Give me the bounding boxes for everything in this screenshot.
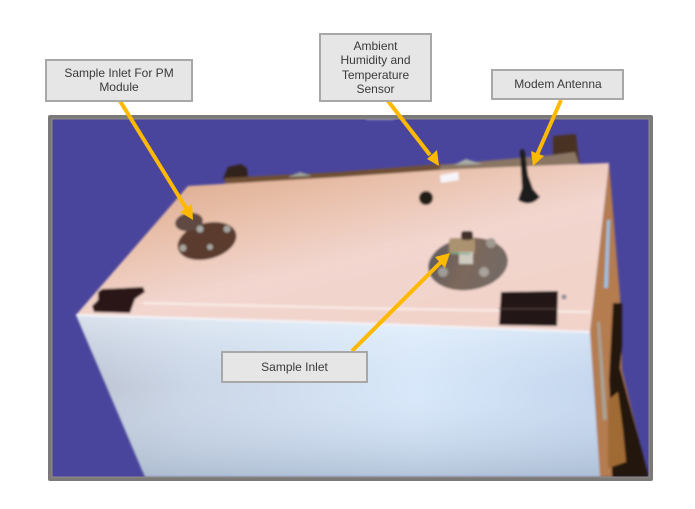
faint artefact at top of photo [366,118,394,120]
PM inlet disc [176,220,238,262]
callout: ambient humidity and temperature sensor: Ambient [353,39,398,53]
arrow: modem antenna [531,100,561,166]
arrow: sample inlet [352,253,450,351]
front panel [76,315,600,477]
callout: ambient humidity and temperature sensor [320,34,431,101]
latch right [499,291,558,326]
photo: enclosure on blue background [48,115,653,481]
callout: ambient humidity and temperature sensor: Temperature [342,68,410,82]
rear bracket right [553,134,580,165]
dark rear strip [609,303,648,477]
lid top surface [76,163,609,332]
callout: modem antenna [492,70,623,99]
callout: sample inlet: Sample Inlet [261,360,329,374]
modem antenna [518,149,540,203]
callout: sample inlet for PM module [46,60,192,101]
main inlet disc [426,236,509,292]
rear shelf [225,164,470,185]
lid seam [143,303,590,312]
arrow: humidity and temperature sensor [388,101,439,166]
callout: ambient humidity and temperature sensor: Humidity and [340,53,411,67]
callout: modem antenna: Modem Antenna [514,77,602,91]
right side panel [590,163,648,477]
callout: sample inlet for PM module: Sample Inlet For PM [64,66,174,80]
callout: sample inlet [222,352,367,382]
callout: sample inlet for PM module: Module [99,80,139,94]
photo inner edge [52,119,649,477]
callout: ambient humidity and temperature sensor: Sensor [356,82,395,96]
arrow: PM module inlet [120,101,193,220]
sticker [440,172,459,183]
latch left [92,287,145,313]
knob [419,191,433,205]
rear bracket left [223,164,248,179]
